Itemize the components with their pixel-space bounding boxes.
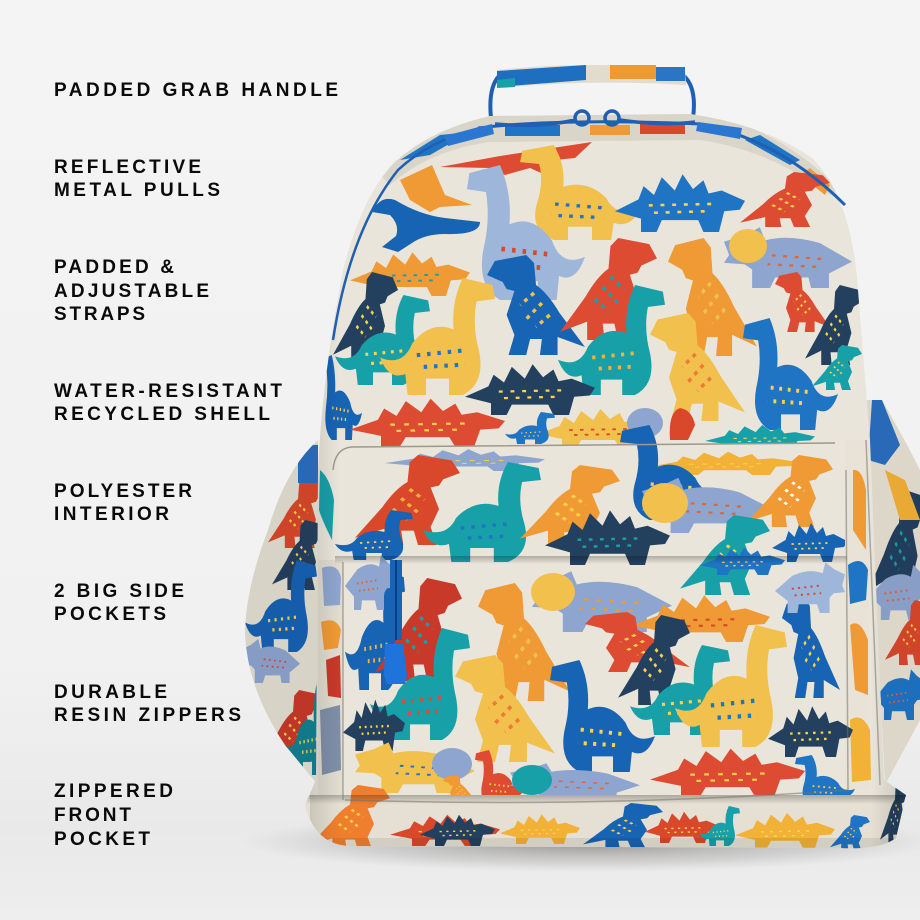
label: 2 big side pockets: 2 BIG SIDE (54, 581, 184, 602)
label: 2 big side pockets: POCKETS (54, 604, 166, 625)
grab handle (490, 65, 694, 118)
lower pocket dinosaurs (343, 548, 855, 805)
label: reflective metal pulls (54, 157, 220, 201)
label: zippered front pocket: POCKET (54, 829, 150, 850)
label: durable resin zippers (54, 682, 241, 726)
bottom panel dinosaurs (306, 785, 906, 848)
label: polyester interior (54, 481, 192, 525)
top panel dinosaurs (320, 142, 863, 450)
label: 2 big side pockets (54, 581, 184, 625)
label: polyester interior: INTERIOR (54, 504, 169, 525)
label: padded grab handle: PADDED GRAB HANDLE (54, 80, 338, 101)
label: polyester interior: POLYESTER (54, 481, 192, 502)
ground shadow (240, 812, 920, 872)
right side pocket (866, 400, 920, 782)
body edge shading (310, 347, 900, 844)
label: zippered front pocket (54, 781, 173, 850)
main body with dinosaur print (300, 100, 920, 860)
backpack illustration (240, 65, 920, 860)
front pocket seams (333, 440, 880, 802)
label: padded and adjustable straps: STRAPS (54, 304, 145, 325)
label: reflective metal pulls: METAL PULLS (54, 180, 220, 201)
label: durable resin zippers: RESIN ZIPPERS (54, 705, 241, 726)
label: padded and adjustable straps (54, 257, 209, 325)
left side pocket (245, 440, 318, 782)
top zipper with blue pulls (333, 111, 845, 340)
side seam strips (318, 470, 871, 795)
label: padded and adjustable straps: ADJUSTABLE (54, 281, 209, 302)
label: zippered front pocket: ZIPPERED (54, 781, 173, 802)
label: water-resistant recycled shell: WATER-RESISTANT (54, 381, 282, 402)
label: zippered front pocket: FRONT (54, 805, 131, 826)
front zipper and pull (384, 560, 407, 684)
label: water-resistant recycled shell (54, 381, 282, 425)
label: water-resistant recycled shell: RECYCLED SHELL (54, 404, 270, 425)
label: durable resin zippers: DURABLE (54, 682, 167, 703)
front pocket flap (333, 425, 848, 595)
flap shadow (335, 556, 847, 563)
label: reflective metal pulls: REFLECTIVE (54, 157, 201, 178)
label: padded and adjustable straps: PADDED & (54, 257, 174, 278)
top zipper gusset print (380, 112, 840, 195)
